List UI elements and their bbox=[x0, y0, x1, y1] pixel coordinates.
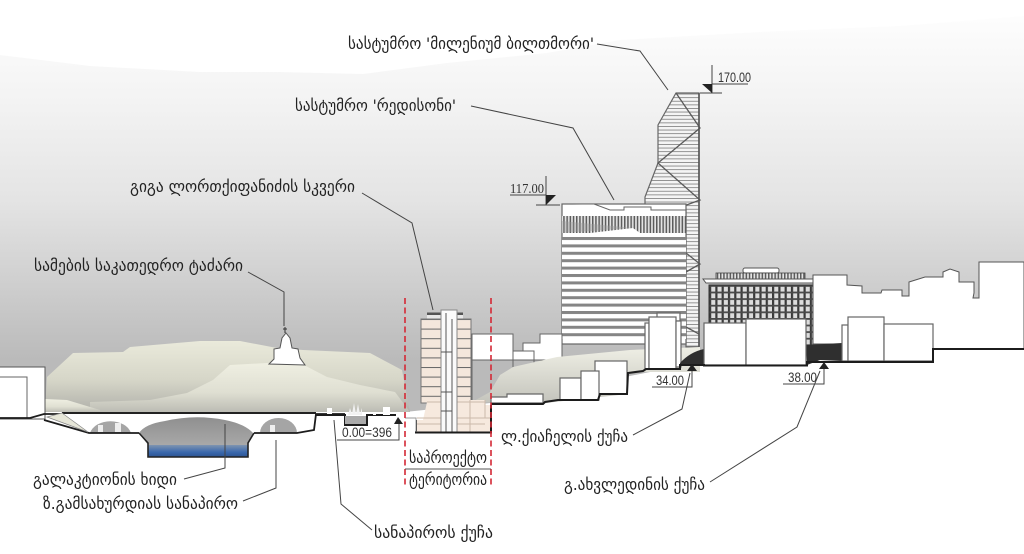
label: Lortkipanidze square bbox=[130, 177, 433, 310]
label: Akhvlediani street bbox=[564, 371, 820, 494]
label: embankment street bbox=[334, 420, 493, 542]
label: Galaktion bridge bbox=[33, 424, 225, 489]
church bbox=[269, 327, 305, 365]
label: Millennium Biltmore hotel: სასტუმრო 'მილენიუმ ბილთმორი' bbox=[348, 34, 594, 53]
label: Sameba cathedral bbox=[34, 256, 284, 326]
level marker 117.00 bbox=[510, 176, 560, 205]
foreground buildings near Kiacheli street bbox=[491, 313, 681, 403]
white skyline buildings on the right bbox=[813, 262, 1024, 349]
river arch with water bbox=[139, 417, 253, 445]
label: project: საპროექტო bbox=[409, 448, 487, 467]
label: Kiacheli street bbox=[501, 373, 690, 446]
street wedge: Akhvlediani bbox=[806, 343, 842, 365]
left arch bbox=[90, 421, 131, 433]
old hotel building with grid facade bbox=[703, 268, 818, 345]
level marker 0.00=396 bbox=[337, 417, 403, 440]
level marker 34.00 bbox=[652, 364, 697, 388]
label: Radisson hotel: სასტუმრო 'რედისონი' bbox=[295, 96, 456, 115]
background sky bbox=[0, 16, 1024, 412]
level marker 0.00=396: 0.00=396 bbox=[342, 425, 392, 440]
deck bbox=[62, 412, 316, 414]
water bbox=[148, 445, 248, 457]
label: Sameba cathedral: სამების საკათედრო ტაძარი bbox=[34, 256, 243, 275]
label: territory: ტერიტორია bbox=[409, 470, 487, 489]
label: Gamsakhurdia embankment bbox=[43, 440, 276, 513]
level marker 170.00 bbox=[700, 65, 751, 93]
level marker 38.00 bbox=[783, 362, 829, 385]
Lortkipanidze tower on the project site bbox=[405, 310, 491, 433]
label: Akhvlediani street: გ.ახვლედინის ქუჩა bbox=[564, 475, 705, 494]
left building bbox=[0, 367, 45, 419]
label: Millennium Biltmore hotel bbox=[348, 34, 668, 90]
tower: Radisson bbox=[562, 204, 686, 344]
ground section line bbox=[491, 349, 1024, 404]
right arch bbox=[260, 418, 297, 433]
project territory boundaries bbox=[405, 298, 491, 489]
tower: Millennium Biltmore bbox=[645, 93, 700, 347]
hills behind the river bbox=[45, 341, 410, 412]
street wedge: Kiacheli bbox=[680, 349, 704, 365]
label: Lortkipanidze square: გიგა ლორთქიფანიძის სკვერი bbox=[130, 177, 355, 196]
embankment street and fountains bbox=[316, 403, 405, 425]
label: Galaktion bridge: გალაკტიონის ხიდი bbox=[33, 470, 177, 489]
label: Gamsakhurdia embankment: ზ.გამსახურდიას სანაპირო bbox=[43, 494, 238, 513]
label: Radisson hotel bbox=[295, 96, 614, 200]
level marker 117.00: 117.00 bbox=[510, 181, 544, 196]
level marker 170.00: 170.00 bbox=[718, 70, 751, 85]
buildings along Akhvlediani street bbox=[704, 317, 933, 365]
label: embankment street: სანაპიროს ქუჩა bbox=[374, 523, 493, 542]
bridge section bbox=[0, 413, 345, 457]
white buildings behind the project site bbox=[472, 334, 562, 400]
hill on the right bbox=[472, 347, 700, 403]
level marker 38.00: 38.00 bbox=[788, 370, 817, 385]
label: Kiacheli street: ლ.ქიაჩელის ქუჩა bbox=[501, 427, 628, 446]
level marker 34.00: 34.00 bbox=[656, 373, 684, 388]
